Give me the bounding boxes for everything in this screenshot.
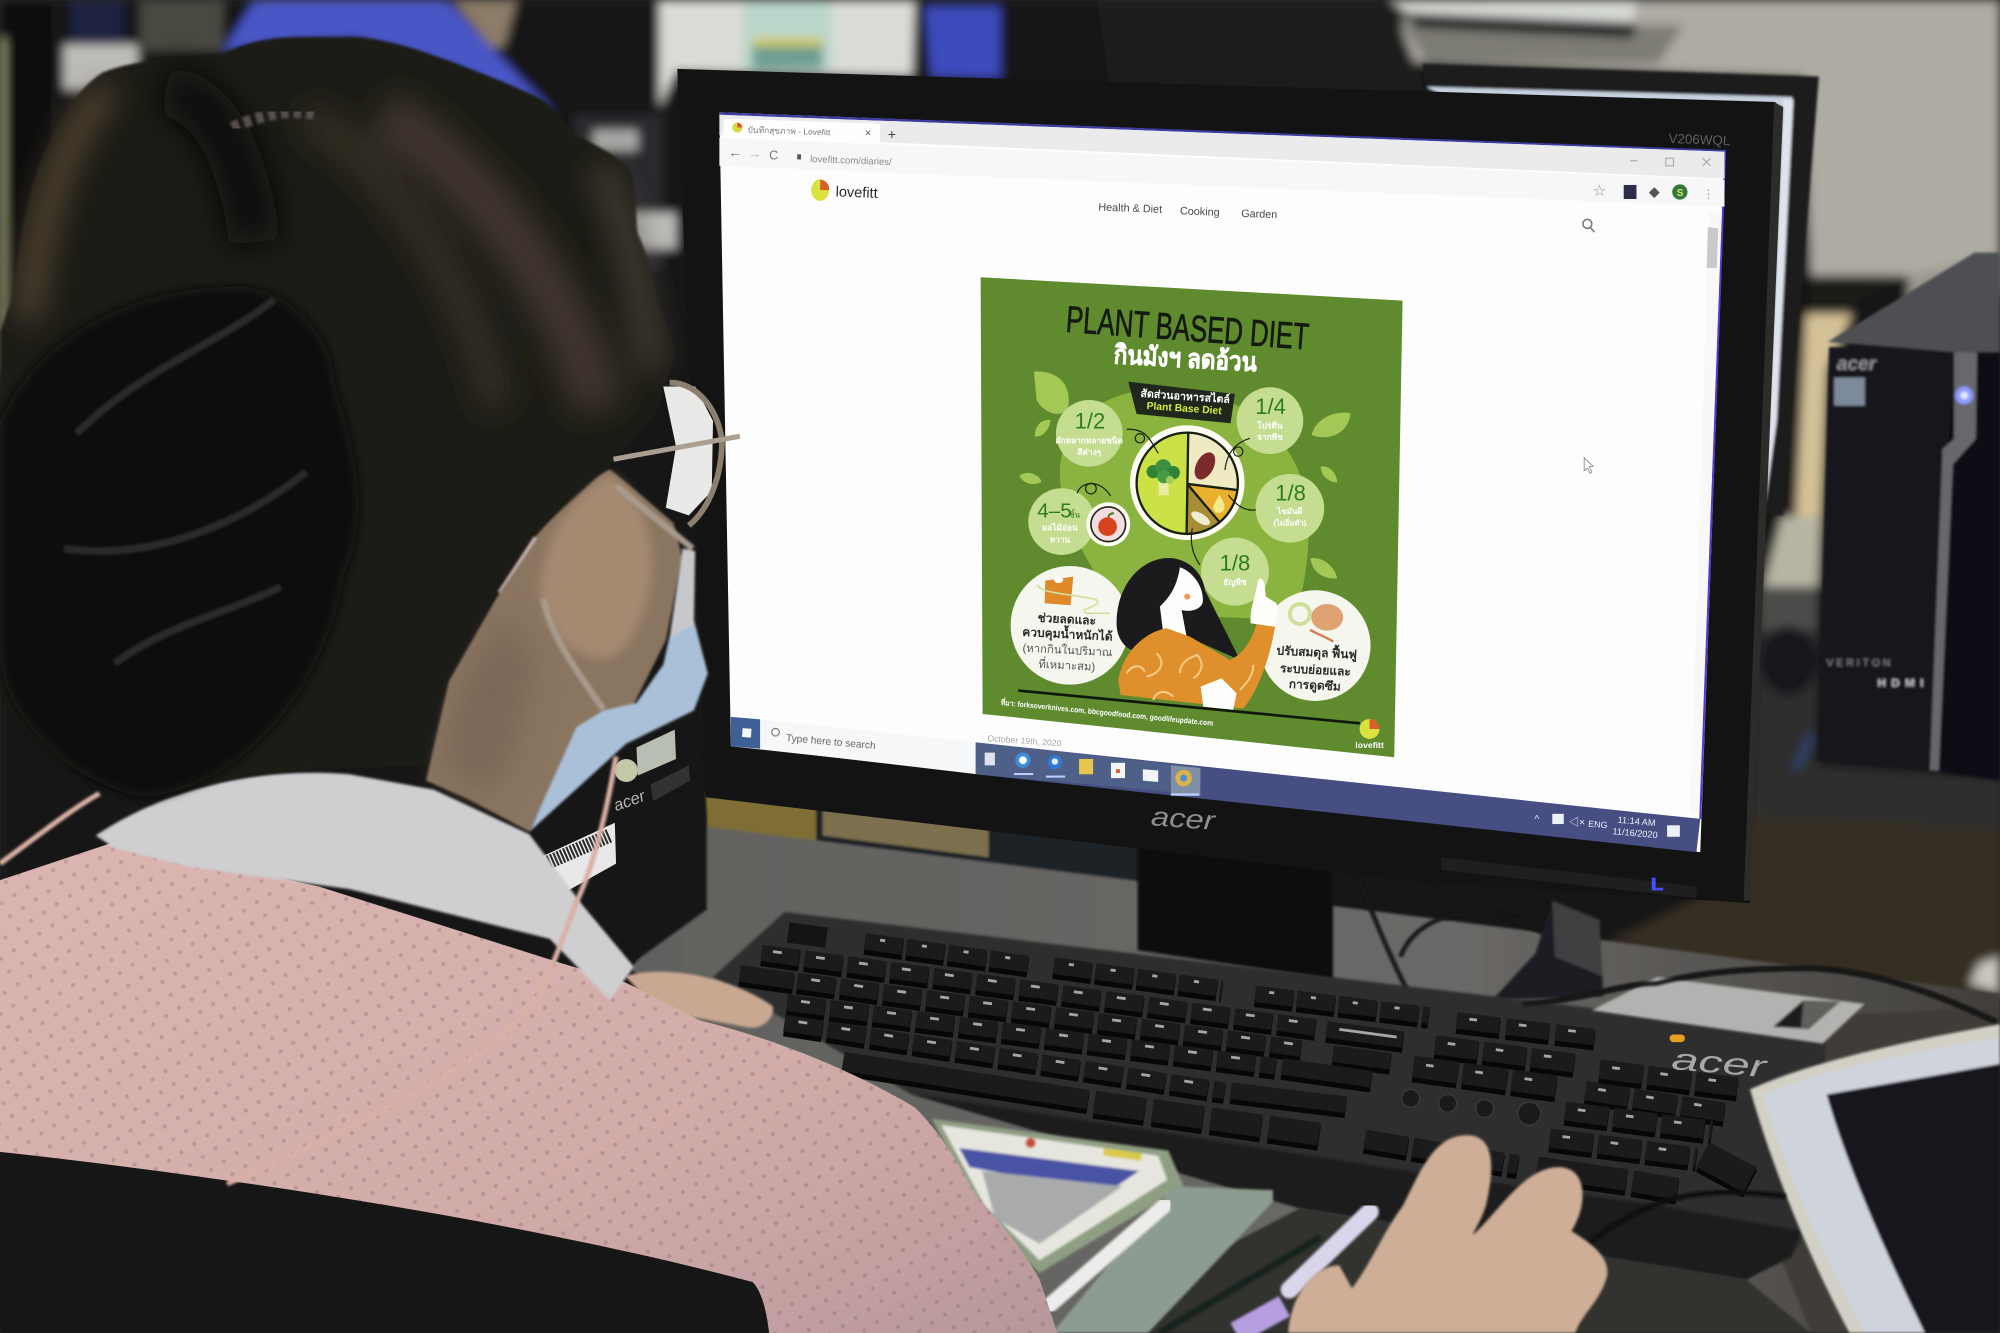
callout: 1/8 good fats: ไขมันดี xyxy=(1276,506,1303,516)
callout: 4-5 pieces of fruit: ชิ้น xyxy=(1069,508,1081,519)
pink blouse xyxy=(0,842,1057,1333)
background monitor xyxy=(1422,64,1819,515)
site navigation: Cooking xyxy=(1180,205,1220,219)
hair clip xyxy=(232,112,319,128)
lovefitt logo xyxy=(1355,719,1384,750)
big leaf backdrop xyxy=(1060,388,1308,620)
infographic: Plant Based Diet xyxy=(981,277,1403,757)
hair xyxy=(1117,558,1240,660)
bean xyxy=(1190,449,1219,483)
site navigation xyxy=(1098,201,1278,221)
site logo: lovefitt xyxy=(835,184,878,202)
browser address bar: ☆ xyxy=(1593,183,1606,198)
Chrome taskbar highlight xyxy=(1171,765,1200,796)
system tray: ENG xyxy=(1588,819,1608,830)
window controls xyxy=(1630,158,1710,166)
benefit circle: weight control: ที่เหมาะสม) xyxy=(1038,656,1096,674)
desktop computer tower: VERITON xyxy=(1827,658,1890,669)
monitor buttons and power light xyxy=(1441,857,1696,898)
mouse cable xyxy=(1588,1192,1786,1244)
fruit plate xyxy=(1086,502,1130,546)
neck and face xyxy=(1160,567,1203,637)
monitor side lip xyxy=(1744,102,1783,901)
callout: 1/4 plant protein: จากพืช xyxy=(1257,432,1283,442)
taskbar icons xyxy=(985,753,1199,796)
chair back xyxy=(0,1152,769,1333)
blouse shading xyxy=(0,842,1057,1333)
screen xyxy=(719,112,1726,852)
background person blue shirt xyxy=(223,0,555,115)
neck shadow xyxy=(440,612,536,797)
benefit circle: digestion: ปรับสมดุล ฟื้นฟู xyxy=(1276,641,1357,663)
monitor xyxy=(677,69,1783,903)
callout: 1/4 plant protein: 1/4 xyxy=(1255,394,1286,419)
hair xyxy=(0,37,676,797)
oil drop xyxy=(1213,495,1225,513)
site logo xyxy=(811,179,878,202)
benefit circle: weight control: ควบคุมน้ำหนักได้ xyxy=(1022,622,1113,645)
plate proportion label xyxy=(1128,382,1235,423)
browser address bar: ⋮ xyxy=(1703,189,1714,201)
browser top border xyxy=(719,112,1726,152)
active browser tab: บันทึกสุขภาพ - Lovefitt xyxy=(747,125,831,138)
browser address bar xyxy=(719,138,1724,207)
desk surface xyxy=(631,791,2000,1333)
desktop computer tower xyxy=(1818,253,2000,781)
key legends xyxy=(773,940,1735,1153)
left hand on desk xyxy=(625,972,773,1028)
ear xyxy=(540,475,652,659)
sweater xyxy=(1118,623,1275,709)
key caps xyxy=(740,941,1750,1189)
desktop computer tower: acer xyxy=(1837,354,1878,375)
page scrollbar xyxy=(1690,212,1722,814)
active browser tab: + xyxy=(888,126,896,142)
keyboard front lip xyxy=(909,1093,1801,1279)
neck and jaw skin xyxy=(426,469,682,832)
monitor bezel xyxy=(677,69,1776,903)
callout: 1/4 plant protein: โปรตีน xyxy=(1256,420,1283,430)
Windows search box xyxy=(760,719,977,774)
grain xyxy=(1189,509,1212,528)
tablet at right xyxy=(1750,1024,2000,1333)
desktop computer tower: HDMI xyxy=(1878,677,1923,689)
site navigation: Health & Diet xyxy=(1098,201,1162,216)
callout: 1/4 plant protein xyxy=(1237,387,1303,454)
Thai subtitle: กินมังฯ ลดอ้วน xyxy=(1113,339,1258,377)
decorative leaves xyxy=(1019,371,1351,578)
right hand on mouse xyxy=(1288,1135,1607,1333)
callout: 1/8 good fats: 1/8 xyxy=(1275,481,1306,506)
callout: 4-5 pieces of fruit: 4–5 xyxy=(1037,499,1072,522)
Windows start button xyxy=(731,717,760,749)
cheek xyxy=(1184,594,1190,600)
scrunchie xyxy=(0,286,358,797)
plate diagram xyxy=(1130,425,1245,540)
earphone cable xyxy=(0,756,616,1184)
green notebook xyxy=(1052,1186,1273,1333)
browser address bar: ← xyxy=(728,144,742,160)
woman illustration xyxy=(1117,558,1278,710)
baseline xyxy=(1018,691,1360,723)
media buttons xyxy=(1402,1089,1541,1125)
system tray: 11/16/2020 xyxy=(1612,826,1658,840)
browser address bar: → xyxy=(747,145,761,161)
callout: 4-5 pieces of fruit: หวาน xyxy=(1050,535,1071,545)
background white monitor xyxy=(659,0,915,107)
mask pink strap xyxy=(496,536,533,591)
stylus xyxy=(1048,1205,1165,1306)
pen and pencil xyxy=(1159,1212,1370,1333)
lovefitt logo: lovefitt xyxy=(1355,740,1384,750)
callout: 1/2 vegetables: สีต่างๆ xyxy=(1077,447,1102,457)
phone on desk xyxy=(932,1119,1184,1273)
key shadows xyxy=(740,945,1750,1193)
browser address bar: C xyxy=(769,147,778,162)
infographic background xyxy=(981,277,1403,757)
taskbar xyxy=(976,742,1700,852)
post date: October 19th, 2020 xyxy=(987,733,1062,748)
raised hand xyxy=(1251,579,1278,627)
benefit circle: weight control: (หากกินในปริมาณ xyxy=(1022,642,1113,659)
mouse cursor xyxy=(1584,458,1593,473)
cable over device xyxy=(1523,968,1996,1022)
benefit circle: digestion xyxy=(1260,590,1371,701)
monitor model label: V206WQL xyxy=(1668,131,1730,148)
collar xyxy=(96,773,634,1000)
system tray xyxy=(1534,814,1680,840)
callout: 1/8 good fats xyxy=(1256,474,1324,543)
callout: 4-5 pieces of fruit: ผลไม้อ่อน xyxy=(1042,523,1078,533)
active browser tab: × xyxy=(865,127,871,139)
system tray: ^ xyxy=(1534,815,1539,826)
mask ear loop xyxy=(543,486,693,709)
barcode sticker xyxy=(543,823,616,893)
monitor cables xyxy=(1335,864,1996,1022)
benefit circle: weight control xyxy=(1011,566,1129,685)
glasses xyxy=(614,383,740,526)
benefit circle: digestion: ระบบย่อยและ xyxy=(1280,661,1351,679)
hair highlights xyxy=(28,89,651,408)
system tray: ◁× xyxy=(1569,816,1585,828)
monitor stand xyxy=(1138,829,1333,980)
keyboard xyxy=(713,912,1827,1279)
callout: 1/8 grains: 1/8 xyxy=(1220,551,1250,576)
plate proportion label: Plant Base Diet xyxy=(1146,401,1223,417)
browser address bar: lovefitt.com/diaries/ xyxy=(810,154,892,168)
certification marks xyxy=(651,765,690,801)
white desk device xyxy=(1592,977,1865,1043)
box brand: acer xyxy=(611,786,649,815)
callout: 1/8 grains: ธัญพืช xyxy=(1223,577,1247,588)
keyboard brand: acer xyxy=(1670,1042,1770,1084)
plate proportion label: สัดส่วนอาหารสไตล์ xyxy=(1140,387,1230,406)
title: PLANT BASED DIET xyxy=(1065,298,1310,358)
arrows to plate xyxy=(1077,429,1256,565)
benefit circle: weight control: ช่วยลดและ xyxy=(1037,611,1096,628)
callout: 4-5 pieces of fruit xyxy=(1028,488,1095,555)
Windows search box: Type here to search xyxy=(785,733,876,752)
broccoli xyxy=(1147,459,1180,495)
benefit circle: digestion: การดูดซึม xyxy=(1288,677,1341,695)
search icon xyxy=(1583,219,1594,232)
callout: 1/8 grains xyxy=(1201,538,1269,606)
callout: 1/2 vegetables: 1/2 xyxy=(1075,408,1105,433)
callout: 1/8 good fats: (ไม่อิ่มตัว) xyxy=(1273,517,1307,528)
system tray: 11:14 AM xyxy=(1617,815,1656,828)
active browser tab xyxy=(722,119,896,147)
browser tab strip xyxy=(719,115,1724,179)
lower hand xyxy=(1201,678,1237,710)
monitor brand logo: acer xyxy=(1150,801,1217,836)
woman at computer xyxy=(0,37,1057,1333)
escape key xyxy=(788,932,827,938)
sources: ที่มา: forksoverknives.com, bbcgoodfood.com, goodlifeupdate.com xyxy=(1000,696,1214,728)
site navigation: Garden xyxy=(1241,208,1278,221)
screen right edge xyxy=(1700,151,1725,819)
sweater leaf pattern xyxy=(1127,653,1253,700)
callout: 1/2 vegetables xyxy=(1056,400,1123,467)
face mask xyxy=(496,486,708,832)
keyboard body xyxy=(713,912,1827,1279)
callout: 1/2 vegetables: ผักหลากหลายชนิด xyxy=(1056,435,1123,445)
box with barcode beside monitor xyxy=(529,702,707,963)
browser address bar: S xyxy=(1677,188,1684,199)
keyboard indicator xyxy=(1670,1035,1685,1042)
scrunchie folds xyxy=(64,300,306,663)
care sticker xyxy=(615,730,676,782)
